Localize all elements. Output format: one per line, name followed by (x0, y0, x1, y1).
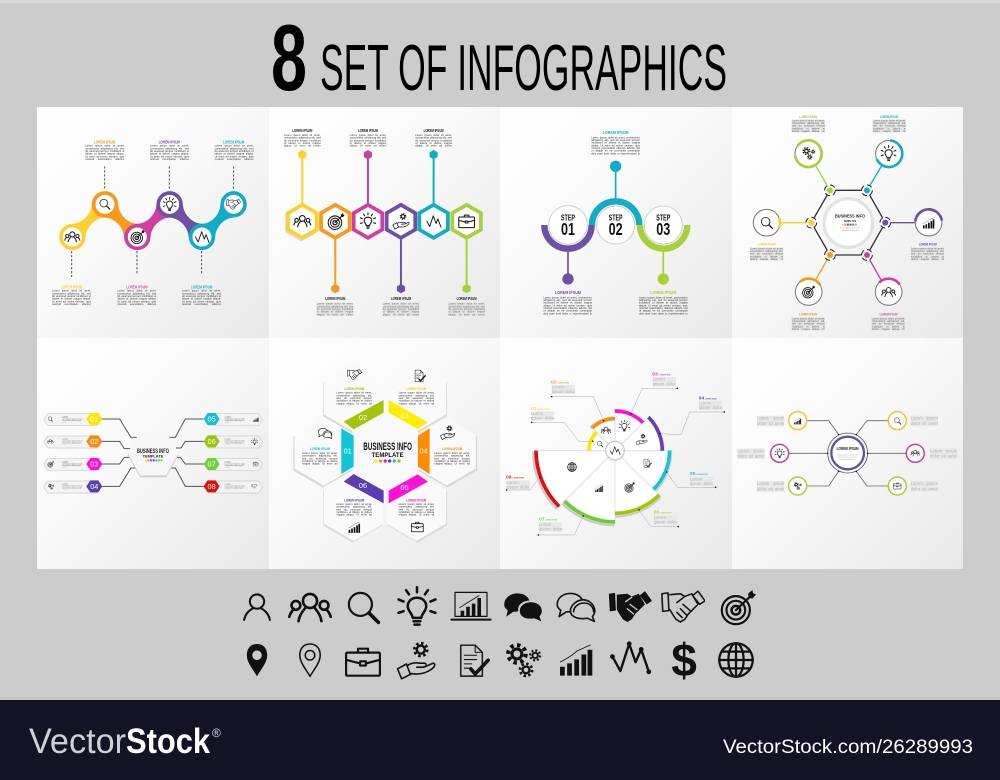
dashed leaders (72, 166, 234, 277)
icon library (243, 586, 756, 686)
numbers: 03 (90, 460, 98, 469)
spokes (780, 166, 915, 280)
satellite arcs (748, 135, 943, 311)
central circle (823, 199, 872, 247)
text blocks (543, 136, 688, 315)
hexagon icons (293, 213, 474, 229)
numbers: 05 (208, 415, 216, 424)
hexagon faces (294, 363, 475, 541)
heading labels: LOREM IPSUM (61, 284, 83, 289)
panel: three steps (500, 107, 732, 338)
title (271, 5, 727, 105)
stems and end markers (298, 150, 470, 293)
sector numbers: 01 (531, 406, 537, 412)
sector numbers: 05 (690, 471, 696, 477)
heading labels: LOREM IPSUM (650, 290, 676, 296)
heading labels (292, 128, 476, 301)
pie wedges (534, 409, 672, 524)
panel: six hexagon flower (269, 338, 500, 569)
text blocks (749, 119, 944, 331)
icon row 2: $ (671, 634, 697, 686)
heading labels: LOREM IPSUM (344, 387, 364, 391)
sector numbers: 06 (654, 510, 659, 516)
connector lines (788, 421, 905, 486)
step numbers: STEP (561, 213, 575, 223)
step circles (549, 206, 682, 244)
heading labels: LOREM IPSUM (126, 284, 148, 289)
sector numbers: LOREM IPSUM (705, 398, 717, 400)
step numbers: STEP (656, 213, 671, 223)
heading labels: LOREM IPSUM (191, 284, 213, 289)
numbers: 01 (90, 415, 98, 424)
step numbers: 01 (561, 219, 575, 239)
central text: TEMPLATE (143, 454, 164, 458)
icon row 2 (247, 634, 753, 686)
vertex nodes (805, 185, 890, 260)
hexagon shadows (293, 365, 477, 543)
central hexagon (811, 190, 885, 255)
sector numbers: LOREM IPSUM (660, 513, 672, 515)
step numbers (561, 213, 671, 239)
heading labels: LOREM IPSUM (442, 447, 462, 451)
text blocks (302, 392, 470, 516)
row icons (47, 417, 258, 489)
connector bands (72, 204, 234, 237)
sector numbers: LOREM IPSUM (557, 382, 570, 384)
sector numbers: LOREM IPSUM (512, 477, 525, 479)
hub circle (827, 433, 867, 473)
panel: hexagon timeline (269, 107, 500, 338)
footer bar (0, 700, 1000, 780)
satellite circles (770, 412, 924, 495)
sector numbers: LOREM IPSUM (696, 474, 709, 476)
panel: circular hub diagram (732, 338, 963, 569)
satellite icons (761, 146, 934, 298)
hub text (834, 214, 865, 232)
heading labels: LOREM IPSUM (406, 387, 426, 391)
hub text: BUSINESS INFO (834, 214, 865, 220)
hub text: TEMPLATE (843, 220, 856, 223)
heading labels (310, 387, 462, 502)
heading labels: LOREM IPSUM (456, 296, 476, 301)
sector numbers: LOREM IPSUM (545, 520, 558, 522)
band numbers (343, 411, 427, 492)
logo: Stock (126, 722, 210, 761)
icon row 1 (244, 587, 756, 625)
heading labels: LOREM IPSUM (879, 313, 897, 317)
leader lines (507, 388, 724, 535)
step numbers: 02 (609, 219, 623, 239)
step numbers: 03 (656, 219, 670, 239)
hub junction dots (826, 434, 868, 472)
numbers: 04 (90, 482, 98, 491)
numbers (90, 415, 216, 491)
panel: eight option rows (37, 338, 269, 569)
central hexagon (128, 431, 179, 477)
row text (62, 416, 247, 490)
sector numbers: 03 (652, 371, 658, 377)
heading labels: LOREM IPSUM (918, 243, 936, 247)
sector numbers (506, 371, 717, 523)
heading labels: LOREM IPSUM (358, 128, 378, 133)
band above footer (0, 697, 1000, 700)
number hexagons (86, 413, 220, 492)
hub text: Lorem ipsum dolor sit amet consectetur (836, 453, 858, 456)
hub text (836, 446, 858, 461)
heading labels: LOREM IPSUM (555, 290, 581, 296)
row bars (44, 414, 263, 493)
heading labels: LOREM IPSUM (94, 139, 116, 144)
heading labels: LOREM IPSUM (344, 498, 364, 502)
hub text: adipiscing elit sed do eiusmod tempor (837, 456, 857, 459)
logo: Vector (29, 722, 126, 761)
grey rims (500, 337, 729, 566)
central text (137, 449, 169, 461)
hub text: LOREM IPSUM (836, 446, 858, 451)
band numbers: 06 (358, 481, 367, 490)
band numbers: 01 (343, 447, 351, 456)
circle nodes (61, 193, 245, 248)
heading labels: LOREM IPSUM (325, 296, 345, 301)
sector numbers: 02 (551, 379, 557, 385)
hub text: adipiscing elit sed do eiusmod (841, 229, 858, 232)
heading labels: LOREM IPSUM (292, 128, 312, 133)
numbers: 08 (208, 482, 216, 491)
vertex dots (808, 187, 888, 258)
heading labels: LOREM IPSUM (223, 139, 245, 144)
text blocks (284, 134, 485, 316)
coloured bands (341, 400, 429, 503)
heading labels: LOREM IPSUM (757, 243, 775, 247)
centre patch (341, 413, 429, 491)
hexagon nodes (285, 203, 482, 242)
heading labels (555, 130, 676, 296)
heading labels: LOREM IPSUM (603, 130, 629, 136)
heading labels: LOREM IPSUM (423, 128, 443, 133)
leader dots (506, 388, 725, 536)
centre circle (606, 441, 624, 460)
sector numbers: 07 (539, 517, 545, 523)
centre heading: TEMPLATE (371, 453, 403, 459)
text blocks (52, 145, 254, 306)
image id: VectorStock.com/26289993 (723, 737, 973, 758)
numbers: 02 (90, 437, 98, 446)
sector numbers: 04 (699, 395, 704, 401)
heading labels: LOREM IPSUM (879, 115, 897, 119)
central text: BUSINESS INFO (137, 449, 169, 455)
heading labels: LOREM IPSUM (391, 296, 411, 301)
text blocks (737, 416, 957, 492)
centre heading (363, 441, 412, 463)
band numbers: 03 (400, 411, 408, 420)
text blocks (506, 377, 722, 532)
logo: ® (212, 726, 221, 740)
logo (29, 722, 221, 761)
sector numbers: 08 (506, 474, 512, 480)
sector numbers: LOREM IPSUM (659, 374, 671, 376)
sector numbers: LOREM IPSUM (537, 409, 549, 411)
heading labels: LOREM IPSUM (799, 115, 817, 119)
hexagon icons (318, 369, 454, 533)
icons in nodes (65, 197, 241, 244)
heading labels (757, 115, 936, 317)
heading labels: LOREM IPSUM (310, 447, 330, 451)
hub text: incididunt ut labore et (840, 458, 855, 461)
panel: stepped radial pie (500, 338, 732, 569)
satellite rings (753, 140, 941, 305)
sector icons (568, 420, 651, 492)
step arcs (544, 201, 687, 249)
band numbers: 02 (358, 413, 367, 422)
centre heading: BUSINESS INFO (363, 441, 412, 453)
heading labels (61, 139, 245, 289)
band numbers: 04 (419, 447, 427, 456)
heading labels: LOREM IPSUM (799, 313, 817, 317)
heading labels: LOREM IPSUM (159, 139, 180, 144)
numbers: 07 (208, 460, 216, 469)
top light strip (0, 0, 1000, 3)
satellite icons (774, 418, 919, 490)
band numbers: 05 (400, 483, 408, 492)
connector lines (102, 419, 204, 486)
hub text: Lorem ipsum dolor sit amet consectetur (839, 227, 860, 230)
step numbers: STEP (609, 213, 623, 223)
panel: timeline of circles (37, 107, 269, 338)
heading labels: LOREM IPSUM (406, 498, 426, 502)
numbers: 06 (208, 437, 216, 446)
panel: hexagon hub with satellites (732, 107, 963, 338)
coloured arcs (503, 339, 727, 562)
stems and dots (562, 161, 669, 285)
